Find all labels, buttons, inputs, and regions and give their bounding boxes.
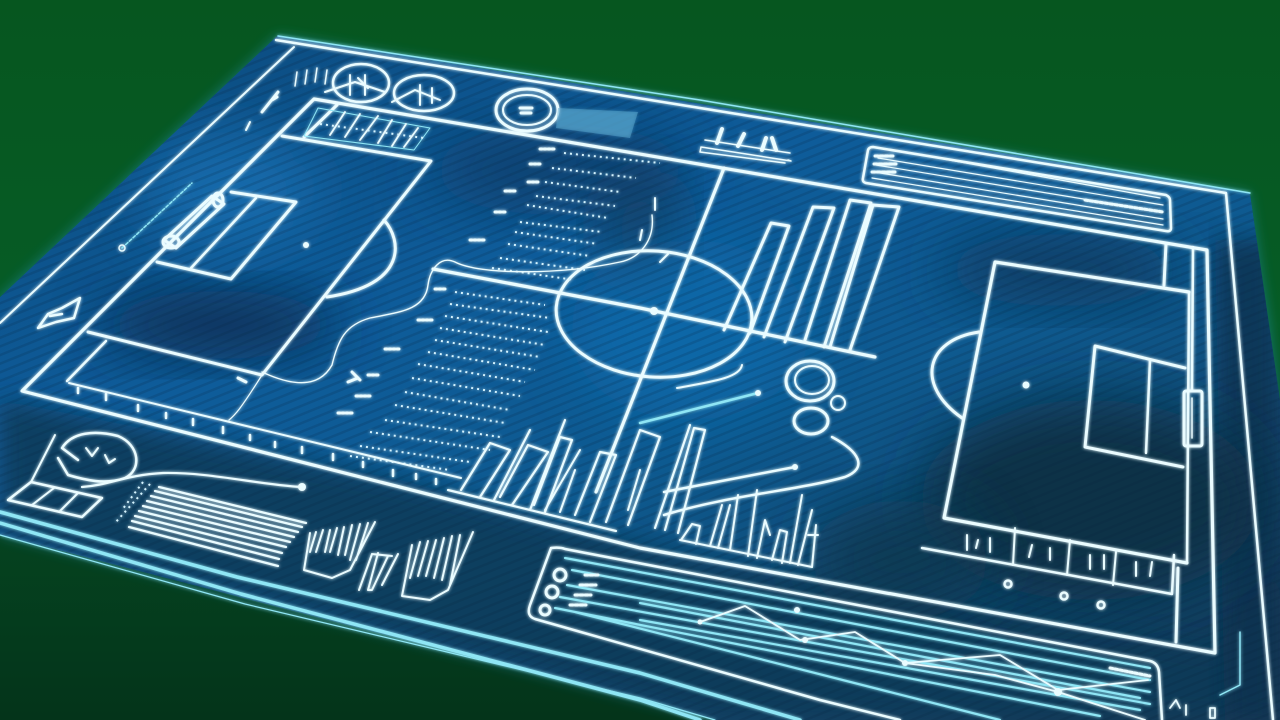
- right goal: [1184, 391, 1202, 446]
- lower right corner marks: [1170, 632, 1240, 718]
- trend curves across pitch: [229, 198, 668, 420]
- panel: top right legend box: [863, 147, 1171, 231]
- left margin markers: [38, 68, 327, 328]
- icons: sketched hatch blocks: [304, 522, 473, 600]
- panel: bottom line chart: [529, 548, 1162, 720]
- halfway line and centre circle: [433, 168, 875, 492]
- bar chart: small lower right bars: [680, 490, 818, 567]
- bar chart: lower bars: [448, 420, 705, 533]
- icon: brain sketch with table: [8, 433, 136, 517]
- bar chart: tall bars: [724, 200, 899, 350]
- left penalty area: [88, 136, 431, 375]
- table: lower dot matrix: [338, 289, 550, 470]
- icon: ring gauge with panel: [496, 89, 638, 138]
- curve arrows: [640, 365, 858, 515]
- icon: overlapping rings: [786, 361, 845, 434]
- connector curve with dot: [82, 473, 306, 491]
- chart: top centre mini bars: [700, 129, 791, 163]
- right penalty area: [932, 244, 1193, 563]
- table: upper dot matrix: [470, 149, 660, 280]
- table: lower right scale: [922, 528, 1178, 642]
- left goal: [163, 193, 224, 248]
- ruler with ticks: [69, 383, 461, 484]
- striped block: [115, 482, 306, 566]
- pitch outline: [22, 99, 1215, 653]
- chart: small histogram in pitch corner: [304, 108, 430, 150]
- icons: top circular badges: [325, 64, 454, 111]
